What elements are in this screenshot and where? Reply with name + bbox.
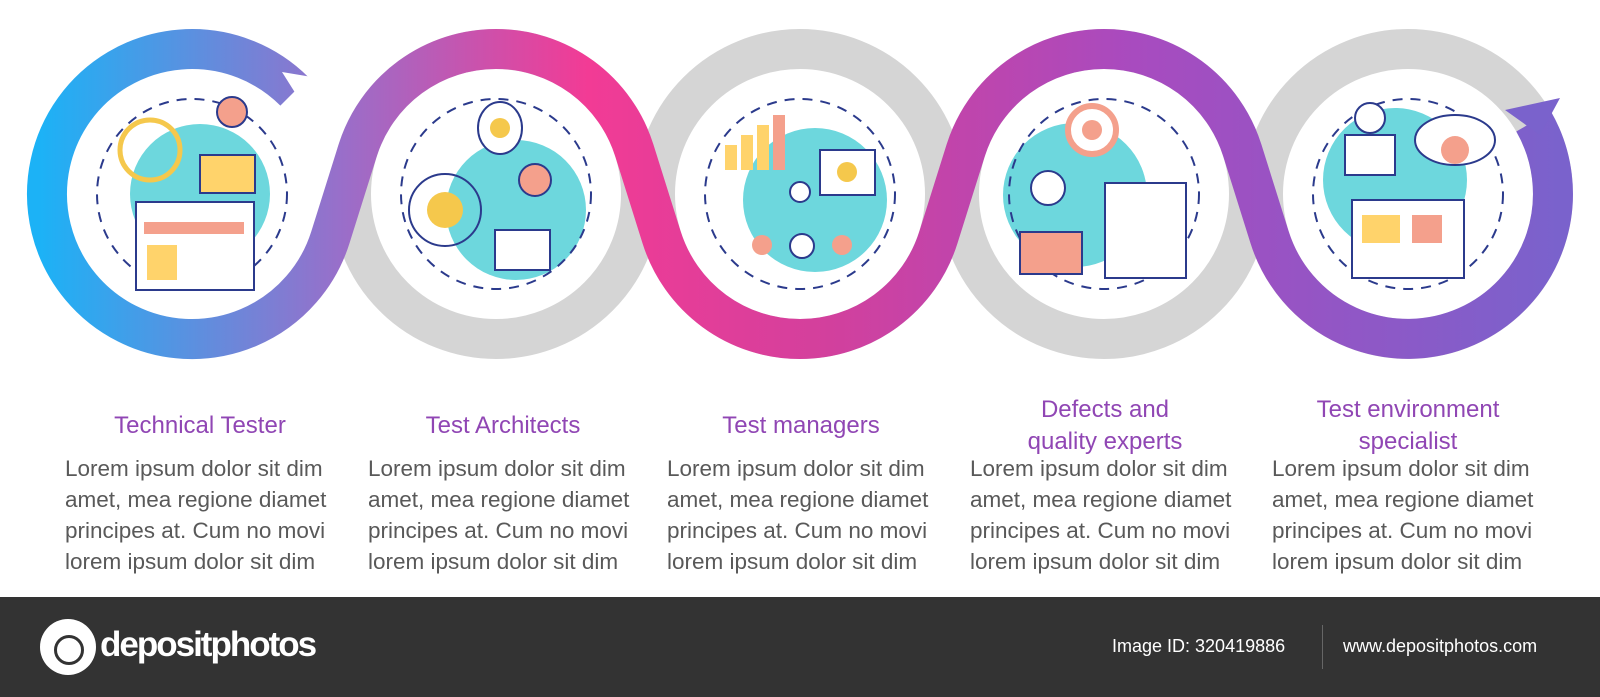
column 5 text: Lorem ipsum dolor sit dim [1272,456,1530,481]
column 3 text: Test managers [722,412,880,439]
column 2 text: Lorem ipsum dolor sit dim [368,456,626,481]
column 4 text: quality experts [1028,428,1182,455]
column 4 text: amet, mea regione diamet [970,487,1231,512]
icon: technical tester [97,97,287,290]
column 3 text: lorem ipsum dolor sit dim [667,549,917,574]
column 2 text: principes at. Cum no movi [368,518,628,543]
column 1 text: amet, mea regione diamet [65,487,326,512]
column 5 text: lorem ipsum dolor sit dim [1272,549,1522,574]
logo [40,619,316,675]
url: www.depositphotos.com [1343,636,1537,656]
column 4 text: principes at. Cum no movi [970,518,1230,543]
column 1 text [65,412,326,574]
column 5 text: Test environment [1317,396,1499,423]
column 2 text: amet, mea regione diamet [368,487,629,512]
column 3 text: amet, mea regione diamet [667,487,928,512]
image id: Image ID: 320419886 [1112,636,1285,656]
column 5 text: principes at. Cum no movi [1272,518,1532,543]
column 3 text [667,412,928,574]
icon: defects experts [1003,99,1199,289]
footer bar [0,597,1600,697]
colored ribbon [47,49,1553,339]
icon: environment specialist [1313,99,1503,289]
column 1 text: principes at. Cum no movi [65,518,325,543]
column 4 text: Defects and [1041,396,1169,423]
column 5 text: specialist [1359,428,1457,455]
icon: test managers [705,99,895,289]
column 2 text [368,412,630,574]
column 1 text: Lorem ipsum dolor sit dim [65,456,323,481]
column 4 text [970,396,1232,574]
column 3 text: principes at. Cum no movi [667,518,927,543]
column 4 text: lorem ipsum dolor sit dim [970,549,1220,574]
logo: depositphotos [100,625,315,664]
column 3 text: Lorem ipsum dolor sit dim [667,456,925,481]
column 4 text: Lorem ipsum dolor sit dim [970,456,1228,481]
column 2 text: lorem ipsum dolor sit dim [368,549,618,574]
column 2 text: Test Architects [426,412,580,439]
arrow head at end [1505,98,1560,135]
column 1 text: lorem ipsum dolor sit dim [65,549,315,574]
arrow notch at start [282,72,330,110]
column 1 text: Technical Tester [114,412,286,439]
gray rings [351,49,1553,339]
column 5 text: amet, mea regione diamet [1272,487,1533,512]
column 5 text [1272,396,1534,574]
icon: test architects [401,99,591,289]
